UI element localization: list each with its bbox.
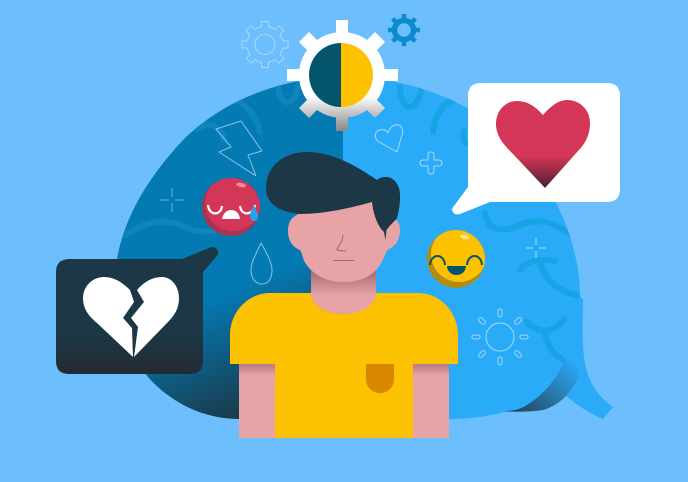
mouth xyxy=(333,260,354,262)
t-shirt xyxy=(230,293,458,438)
speech bubble: white with heart xyxy=(452,83,620,214)
icon: broken heart xyxy=(83,277,179,357)
icon: large half-and-half gear xyxy=(287,20,398,131)
icon: plus right xyxy=(526,238,546,258)
pocket xyxy=(366,364,394,393)
doodle strokes: right half xyxy=(400,85,580,361)
nose xyxy=(337,235,346,251)
infographic illustration: emotional balance xyxy=(56,14,620,438)
icon: water drop xyxy=(251,243,272,284)
face and ears xyxy=(288,200,400,282)
speech bubble: dark with broken heart xyxy=(56,247,218,374)
icon: plus left xyxy=(160,188,184,212)
outline icons xyxy=(160,22,546,365)
emoji: sad red face xyxy=(202,175,261,236)
icon: outline heart xyxy=(375,125,403,152)
icon: tear xyxy=(250,205,258,221)
icon: sun xyxy=(472,309,528,365)
icon: plus outline xyxy=(420,152,442,174)
neck xyxy=(311,268,376,314)
icon: lightning bolt xyxy=(216,121,262,176)
person xyxy=(230,152,458,438)
icon: red heart xyxy=(496,100,590,188)
emoji: happy yellow face xyxy=(427,226,487,288)
speech-bubble head: left half xyxy=(115,77,343,419)
speech-bubble head: right half xyxy=(343,77,613,419)
icon: small blue gear xyxy=(388,14,420,46)
doodle strokes: left half xyxy=(125,85,298,235)
arms xyxy=(239,364,449,438)
icon: outline gear xyxy=(242,22,288,68)
hair xyxy=(266,152,400,240)
